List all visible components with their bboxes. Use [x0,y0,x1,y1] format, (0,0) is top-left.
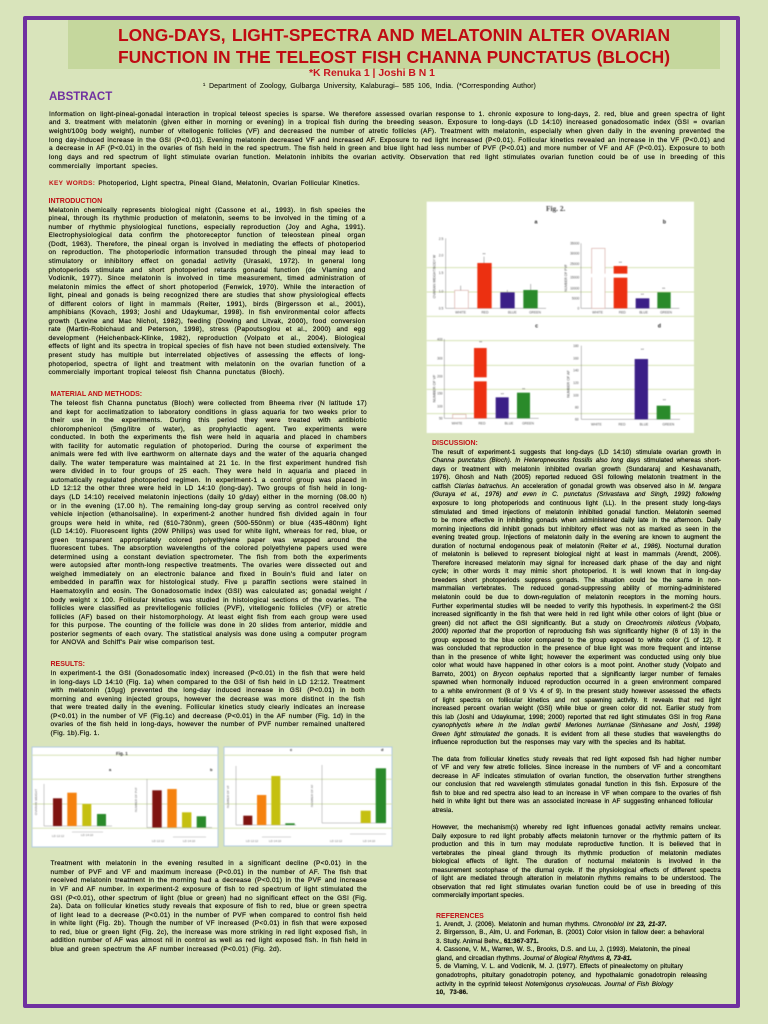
methods text: for this purpose. The counting of the follicle was done in 20 slides from anterior, middle and [50,622,367,629]
discussion text: increased percent ovarian weight (GSI) while blue or green color did not. Earlier study from [432,705,721,712]
results text: ovaries of the fish held in long-days, however the number of PVF number remained unaltered [50,721,365,728]
introduction text: (Dodt, 1963). Therefore, the pineal organ is involved in mediating the effects of photoperiod [48,241,366,248]
chart b: ** [662,286,666,291]
discussion paragraph: mechanism [432,824,721,899]
title line 1: LONG-DAYS, LIGHT-SPECTRA AND MELATONIN ALTER OVARIAN [118,25,670,45]
chart c: NUMBER OF VF [432,374,436,402]
chart c: 50 [439,416,443,420]
chart b: NUMBER OF PVF [564,264,568,292]
chart d: RED [618,423,626,427]
references list: activity in the cyprinid teleost Notemigonus crysoleucas. Journal of Fish Biology [436,981,673,988]
methods text: automatically regulated photoperiod regimen. In experiment-1 a control group was placed in [50,477,367,484]
discussion text: group exposed to the blue color compared to the group exposed to white color (1 of 12). It [432,637,721,644]
methods text: (LD 14:10). Fluorescent lights (20W Philips) was used for white light, whereas for red, blue, or [50,528,367,535]
references list [436,921,707,996]
discussion text: Further experimental studies will be needed to verify this hypothesis. In experiment-2 the GSI [432,603,721,610]
discussion paragraph: mechanism: of light are mediated through alteration in melatonin rhythms remains to be understood. The [432,875,721,882]
heading: references: REFERENCES [436,913,484,920]
chart b: ** [619,260,622,265]
methods text: follicles (AF) based on their histomorphology. At least eight fish from each group were used [50,614,367,621]
references list: gonadotrophs, pituitary gonadotropin potency, and hypothalamic gonadotropin releasing [436,972,707,979]
discussion text [432,449,721,746]
methods text: Haematoxylin and eosin. The Gonadosomatic index (GSI) was calculated as; gonadal weight / [50,588,367,595]
discussion paragraph: mechanism: commercially important species. [432,892,524,899]
chart a [432,237,546,314]
discussion text: cyanophlyctis where in the Indian gerbil Meriones hurrianae (Sinhasane and Joshi, 1998) [432,722,721,729]
chart d: ** [663,397,666,402]
chart c: WHITE [452,422,463,426]
figure 1 right panel: charts c and d: NUMBER OF AF [310,784,314,807]
discussion text: days or treatment with melatonin inhibited ovarian growth (Sundararaj and Keshavanath, [432,466,721,473]
introduction text: Vodicnik, 1977). Since melatonin is involved in time measurement, timed administration of [48,275,366,282]
results text: in long-days LD 14:10 (Fig. 1a) when compared to the GSI of fish held in LD 12:12. Treatment [50,679,365,686]
methods text: weighed immediately on an electronic balance and fixed in Bouin's fluid and later on [50,571,367,578]
figure 1 left panel: charts a and b: NUMBER OF PVF [134,787,138,812]
discussion text: to a white environment (8 of 9 Vs 4 of 9). In the present study however assessed the effects [432,688,721,695]
figure 1 left panel: charts a and b: OVARIAN WEIGHT [34,789,38,815]
chart c: 400 [437,337,443,341]
figure 1 left panel: charts a and b: LD 12:12 [52,834,65,838]
chart d: 80 [575,406,579,410]
results text: (P<0.01) in the number of VF (Fig.1c) and decrease (P<0.01) in the AF number (Fig. 1d) in the [50,713,365,720]
methods text: animals were fed with live earthworm on alternate days and the water of the aquaria changed [50,451,367,458]
discussion paragraph: follicular kinetics: atresia. [432,807,453,814]
discussion text: duration of nocturnal endogenous peak of melatonin (Reiter et al., 1986). Nocturnal duration [432,543,721,550]
results text: morning and evening injected groups, however the decrease was more distinct in the fish [50,696,365,703]
heading: abstract: ABSTRACT [49,91,112,103]
abstract text: and 3. treatment with melatonin (given either in morning or evening) in a tropical fish during the breeding season. Exposure to long-days (LD 14:10) increased gonadosomatic index (GSI = ovarian [49,119,725,126]
introduction text: growth (Levine and Mac Nichol, 1982), feeding (Dowing and Litvak, 2000), food conversion [48,318,366,325]
introduction text: pineal, through its rhythmic production of melatonin, seems to be involved in the timing of a [48,215,366,222]
abstract text: weight/100g body weight), number of vitellogenic follicles (VF) and decreased the number of atretic follicles (AF). Treatment with melatonin, especially when given daily in the evening prevented the [49,128,725,135]
methods text: days (LD 14:10) received melatonin injections (daily 10 g/day) either in the morning (08.00 h) [50,494,367,501]
authors: *K Renuka 1 | Joshi B N 1 [309,68,435,79]
chart d: GREEN [662,423,675,427]
introduction text: light, pineal and gonads is being recognized there are studies that show physiological effects [48,292,366,299]
discussion text: Channa punctatus (Bloch). In Heteropneustes fossilis also long days stimulated whereas short- [432,457,721,464]
discussion text: melatonin could be due to down-regulation of melatonin receptors in the morning hours. [432,594,721,601]
treatment results text: addition number of AF was almost nil in control as well as red light exposed fish. In fish held in [50,937,367,944]
methods text [50,400,367,646]
discussion text: mammalian vertebrates. The reduced gonad-suppressing ability of morning-administered [432,585,721,592]
treatment results text: GSI (P<0.01), other spectrum of light (blue or green) had no significant effect on the GSI (Fig. [50,895,367,902]
results text: In experiment-1 the GSI (Gonadosomatic index) increased (P<0.01) in the fish that were held [50,670,365,677]
chart a: 2.0 [439,254,443,258]
chart d: WHITE [591,423,602,427]
figure 1 right panel: charts c and d: LD 14:10 [363,839,376,843]
methods text: LD 12:12 the other three were held in LD 14:10 (long-day). Two groups of fish held in long- [50,485,367,492]
discussion text: breeders short photoperiods suppress gonads. The situation could be the same in non- [432,577,721,584]
discussion text: 1976). Ghosh and Nath (2005) reported reduced GSI following melatonin treatment in the [432,474,721,481]
discussion text: exposure to long photoperiods and continuous light (LL). In the present study long-days [432,500,721,507]
discussion paragraph: mechanism: measurement scotophase of the diurnal cycle. If the physiological effects of different spectra [432,867,721,874]
figure 2: four bar charts: c [535,324,538,330]
introduction text: Electrophysiological data confirm the photoreceptor function of teleostean pineal organ [48,232,366,239]
introduction text: on reproduction. The photoperiodic information transuded through the pineal may lead to [48,249,366,256]
chart a: WHITE [455,310,467,314]
chart a: BLUE [508,310,517,314]
figure 1 left panel: charts a and b: LD 14:10 [183,839,196,843]
discussion text: Green light stimulated the gonads. It is evident from all these studies that wavelengths do [432,731,721,738]
discussion text: spawned when hormonally induced reproduction occurred in a green environment compared [432,679,721,686]
discussion text: 2000) reported that the proportion of reproducing fish was significantly higher (6 of 13) in the [432,628,721,635]
treatment results text: 2a). Data on follicular kinetics study reveals that exposure of fish to red, blue or green spectra [50,903,367,910]
methods text: their use in the experiments. During this period they were treated with antibiotic [50,417,367,424]
chart d: 160 [573,356,579,360]
chart b: 15000 [570,275,579,279]
chart c: GREEN [522,422,535,426]
discussion text: evening treated group. Injections of melatonin daily in the evening are known to augment the [432,534,721,541]
references list: 3. Study. Animal Behv., 61:367-371. [436,938,539,945]
results text: that were treated daily in the evening. Follicular kinetics study clearly indicates an increase [50,704,365,711]
discussion text: (Guraya et al., 1976) and even in C. punctatus (Srivastava and Singh, 1992) following [432,491,721,498]
figure 1 left panel: charts a and b: b [210,767,213,772]
methods text: groups were held in white, red (610-730nm), green (500-550nm) or blue (435-480nm) light [50,520,367,527]
discussion paragraph: mechanism: production and this in turn may modulate reproductive function. It is believed that in [432,841,721,848]
methods text: conducted. In both the experiments the fish were held in aquaria and placed in chambers [50,434,367,441]
chart a: 0.5 [439,306,443,310]
chart c: 300 [437,357,443,361]
results text: (Fig. 1b).Fig. 1. [50,730,100,737]
discussion paragraph: mechanism: observation that red light stimulates ovarian function could be of use in breeding of this [432,884,721,891]
chart a: 1.5 [439,271,443,275]
methods text: were autopsied after month-long respective treatments. The ovaries were dissected out and [50,562,367,569]
affiliation: ¹ Department of Zoology, Gulbarga University, Kalaburagi– 585 106, India. (*Corresponding Author) [203,83,536,90]
methods text: green transparent appropriately colored polyethylene paper was wrapped around the [50,537,367,544]
treatment results text: to red, blue or green light (Fig. 2c), the increase was more striking in red light exposed fish, in [50,929,367,936]
figure 2: four bar charts: b [663,219,667,225]
chart d: 180 [573,344,579,348]
references list: gland, and circadian rhythms. Journal of Biogical Rhythms 8, 73-81. [436,955,632,962]
chart b [564,242,679,315]
figure 1 right panel: charts c and d: LD 14:10 [269,839,282,843]
introduction text: effects of light and its spectra in tropical species of fish have not been studied extensively. The [48,343,366,350]
methods text: or in the evening (17.00 h). The remaining long-day group serving as control received only [50,503,367,510]
abstract text: Information on light-pineal-gonadal interaction in tropical teleost species is sparse. We therefore assessed ovarian response to 1. chronic exposure to long-days, 2. red, blue and green spectra of light [49,111,725,118]
figure 1 right panel: charts c and d: LD 12:12 [330,839,343,843]
introduction text: number of rhythmic physiological functions, especially reproduction (Joy and Agha, 1991). [48,224,366,231]
discussion paragraph: follicular kinetics: The data from follicular kinetics study reveals that red light exposed fish had higher number [432,756,721,763]
methods text: were divided in to four groups of 25 each. They were held in aquaria and placed in [50,468,367,475]
figure 2: four bar charts: a [535,219,538,225]
discussion text: this lab (Joshi and Udaykumar, 1998; 2000) reported that red light stimulates GSI in frog Rana [432,714,721,721]
abstract text: long day-induced increase in the GSI (P<0.01). Evening melatonin decreased VF and increased AF. Exposure to red light increased (P<0.01). Follicular kinetics revealed an increase in the VF (P<0.01) and [49,137,725,144]
chart b: BLUE [639,311,649,315]
abstract text: a decrease in AF (P<0.01) in the ovaries of fish held in the red spectrum. The fish held in green and blue light had less number of PVF (P<0.01) and more number of VF and AF (P<0.01). Exposure to both [49,145,725,152]
discussion text: Barreto, 2001) on Brycon cephalus reported that a significantly larger number of females [432,671,721,678]
references list: 10, 73-86. [436,989,468,996]
chart c: 150 [437,391,443,395]
chart a: 1.0 [439,289,443,293]
introduction text: development (Heichenback-Klinke, 1982), reproduction (Volpato et al., 2004). Biological [48,335,366,342]
treatment results text: in white light (Fig. 2b). Though the number of VF increased (P<0.01) in fish that were exposed [50,920,367,927]
chart a: ** [482,252,486,257]
methods text: fluorescent tubes. The absorption wavelengths of the colored polyethylene papers used were [50,545,367,552]
treatment results text: received melatonin treatment in the morning had a decrease (P<0.01) in the PVF and increase [50,877,367,884]
title line 2: FUNCTION IN THE TELEOST FISH CHANNA PUNCTATUS (BLOCH) [118,47,670,67]
discussion text: Therefore increased melatonin may signal for increased dark phase of the day and night [432,560,721,567]
discussion text: to be more effective in inhibiting gonads when administered daily late in the afternoon. Daily [432,517,721,524]
figure 2: four bar charts: d [658,324,661,330]
methods text: determined using a constant deviation spectrometer. The fish from both the experiments [50,554,367,561]
references list: 4. Cassone, V. M., Warren, W. S., Brooks, D.S. and Lu, J. (1993). Melatonin, the pineal [436,946,690,953]
chart b: 25000 [570,262,579,266]
treatment results text: of light lead to a decrease (P<0.01) in the number of PVF when compared to control fish held [50,912,367,919]
discussion paragraph: mechanism: However, the mechanism(s) whereby red light influences gonadal activity remains unclear. [432,824,721,831]
chart d: 120 [573,381,579,385]
figure 1 left panel: charts a and b: LD 14:10 [81,833,94,837]
introduction text: photoperiods stimulate and short photoperiod retards gonadal function (de Vlaming and [48,267,366,274]
discussion text: catfish Clarias batrachus. An acceleration of gonadal growth was observed also in M. tengara [432,483,721,490]
discussion text: increased significantly in the fish that were held in red light while other colors of light (blue or [432,611,721,618]
methods text: for ANOVA and Schiff's Pair wise comparison test. [50,639,215,646]
abstract text: commercially important species. [49,163,158,170]
discussion text: color what would have happened in other colors is a moot point. Another study (Volpato and [432,662,721,669]
chart b: GREEN [660,311,673,315]
chart c [432,337,539,426]
chart a: 2.5 [439,237,443,241]
chart c: 100 [437,404,443,408]
methods text: daily. The water temperature was maintained at 21 1c. In the first experiment hundred fish [50,460,367,467]
chart a: OVARIAN WEIGHT/BODY W [432,254,436,298]
heading: results: RESULTS: [50,661,85,668]
chart b: WHITE [592,311,604,315]
chart b: 35000 [570,242,579,246]
results text: with melatonin (10µg) prevented the long-day induced increase in GSI (P<0.01) in both [50,687,365,694]
methods text: chloromphenicol (5mg/litre of water), as prophylactic agent. Two experiments were [50,426,367,433]
references list: 5. de Vlaming, V. L. and Vodicnik, M. J. (1977). Effects of pinealectomy on pituitary [436,963,683,970]
introduction text: commercially important tropical teleost fish Channa punctatus (Bloch). [48,369,284,376]
chart c: BLUE [505,422,514,426]
chart d: 100 [573,393,579,397]
chart b: 30000 [570,252,579,256]
treatment results text: in VF and AF number. In experiment-2 exposure of fish to red spectrum of light stimulated the [50,886,367,893]
discussion paragraph: follicular kinetics: fish to blue and red spectra also lead to an increase in VF when compare to the ovaries of fish [432,790,721,797]
discussion text: cycle; in other words it may mimic short photoperiod. It is well known that in long-day [432,568,721,575]
chart d: NUMBER OF AF [566,369,570,398]
discussion paragraph: mechanism: Daily exposure to red light probably affects melatonin turnover or the rhythmic pattern of its [432,833,721,840]
introduction text: rate (Martin-Robichaud and Peterson, 1998), stress (Papoutsoglou et al., 2000) and egg [48,326,366,333]
introduction text: stimulatory or inhibitory effect on gonadal activity (Urasaki, 1972). In general long [48,258,366,265]
discussion paragraph: follicular kinetics: held in white light but there was an associated increase in AF suggesting enhanced follicular [432,798,713,805]
introduction text: amphibians (Kovach, 1993; Joshi and Udaykumar, 1998). In fish environmental color affects [48,309,366,316]
figure 1 right panel: charts c and d: LD 12:12 [246,839,259,843]
chart b: 5000 [572,296,579,300]
title band [68,20,720,69]
chart d: 140 [573,369,579,373]
methods text: embedded in paraffin wax for histological study. Five µ paraffin sections were stained in [50,579,367,586]
key words: KEY WORDS: Photoperiod, Light spectra, Pineal Gland, Melatonin, Ovarian Follicular Kinetics. [49,180,360,187]
chart c: ** [522,386,526,391]
discussion paragraph: mechanism: vertebrates the pineal gland through its rhythmic production of melatonin mediates [432,850,721,857]
figure 1 right panel: charts c and d: c [290,747,293,752]
heading: discussion: DISCUSSION: [432,440,478,447]
chart a: RED [481,310,489,314]
chart b: 0 [577,306,579,310]
discussion text: green) did not affect the GSI significantly. But a study on Oreochromis niloticus (Volpato, [432,620,721,627]
abstract text [48,111,725,170]
discussion paragraph: follicular kinetics [432,756,721,814]
chart d [566,344,680,427]
discussion text: morning injections did inhibit gonads but inhibitory effect was not as marked as seen in the [432,526,721,533]
introduction text: present study has multiple but interrelated objectives of assessing the effects of long- [48,352,366,359]
figure 1 right panel: charts c and d: d [381,747,384,752]
discussion paragraph: follicular kinetics: of VF and very few atretic follicles. Since increase in the numbers of VF and a concomitant [432,764,721,771]
treatment results text: blue and green spectrum the AF number increased (P<0.01) (Fig. 2d). [50,946,282,953]
figure 2: four bar charts [426,201,694,434]
results text [50,670,365,737]
references list: 2. Birgersson, B., Alm, U. and Forkman, B. (2001) Color vision in fallow deer: a behavioral [436,929,704,936]
chart a: GREEN [529,310,542,314]
discussion text: than in the presence of white light; however the experiment was conducted using only blue [432,654,721,661]
introduction text: Melatonin chemically represents biological night (Cassone et al., 1993). In fish species the [48,207,366,214]
discussion text: influence reproduction but the responses may vary with the species and its habitat. [432,739,686,746]
methods text: vehicle injection (ethanolsaline). In experiment-2 another hundred fish divided again in four [50,511,367,518]
methods text: posterior segments of each ovary. The statistical analysis was done using a computer program [50,631,367,638]
chart d: 60 [575,417,579,421]
figure 1 left panel: charts a and b: LD 12:12 [152,839,165,843]
figure 2: four bar charts: Fig. 2. [546,204,565,213]
methods text: and kept for acclimatization to laboratory conditions in glass aquaria for two weeks prior to [50,409,367,416]
methods text: follicles were classified as previtellogenic follicles (PVF), vitellogenic follicles (VF) or atretic [50,605,367,612]
discussion paragraph: mechanism: biological effects of light. The duration of nocturnal melatonin is involved in the [432,858,721,865]
discussion paragraph: follicular kinetics: our conclusion that red wavelength stimulates gonadal function in this fish. Exposure of the [432,781,721,788]
discussion text: of melatonin is believed to represent biological night at least in mammals (Arendt, 2006). [432,551,721,558]
introduction text: of different colors of light in mammals (Reiter, 1991), birds (Birgersson et al., 2001), [48,301,366,308]
discussion text: was concluded that reproduction in the presence of blue light was more frequent and intense [432,645,721,652]
treatment results text: number of PVF and VF and maximum increase (P<0.01) in the number of AF. The fish that [50,869,367,876]
chart d: BLUE [640,423,649,427]
introduction text [48,207,366,376]
chart c: 200 [437,374,443,378]
treatment results text [50,860,367,953]
figure 1 left panel: charts a and b: Fig. 1 [116,751,128,756]
methods text: body weight x 100. Follicular kinetics was studied in histological sections of the ovaries. The [50,597,367,604]
introduction text: melatonin mimics the effect of short photoperiod (Fenwick, 1970). While the interaction of [48,284,366,291]
figure 1 right panel: charts c and d: NUMBER OF VF [226,785,230,808]
chart c: ** [501,391,504,396]
heading: introduction: INTRODUCTION [48,198,102,205]
figure 1 left panel: charts a and b: a [109,767,112,772]
chart c: ** [479,340,483,345]
discussion text: stimulated and timed injections of melatonin inhibited gonadal function. Melatonin seemed [432,509,721,516]
chart b: RED [619,311,626,315]
chart b: ** [641,292,644,297]
discussion text: of light spectra on follicular kinetics and not spawning activity. It reveals that red light [432,697,721,704]
treatment results text: Treatment with melatonin in the evening resulted in a significant decline (P<0.01) in the [50,860,367,867]
discussion text: The result of experiment-1 suggests that long-days (LD 14:10) stimulate ovarian growth in [432,449,721,456]
discussion paragraph: follicular kinetics: decrease in AF indicates stimulation of ovarian function, the observation further strengthens [432,773,721,780]
chart d: ** [641,347,644,352]
methods text: The teleost fish Channa punctatus (Bloch) were collected from Bheema river (N latitude 17) [50,400,367,407]
methods text: with facility for automatic regulation of photoperiod. During the course of experiment the [50,443,367,450]
chart c: RED [478,422,486,426]
introduction text: photoperiod, spectra of light and treatment with melatonin on the ovarian function of a [48,361,366,368]
chart b: 10000 [570,286,579,290]
abstract text: long days and red spectrum of light stimulate ovarian function. Melatonin inhibits the ovarian activity. Observation that red light stimulates ovarian function could be of use in breeding of this [49,154,725,161]
heading: material and methods: MATERIAL AND METHODS: [50,391,142,398]
references list: 1. Arendt, J. (2006). Melatonin and human rhythms. Chronobiol Int 23, 21-37. [436,921,667,928]
